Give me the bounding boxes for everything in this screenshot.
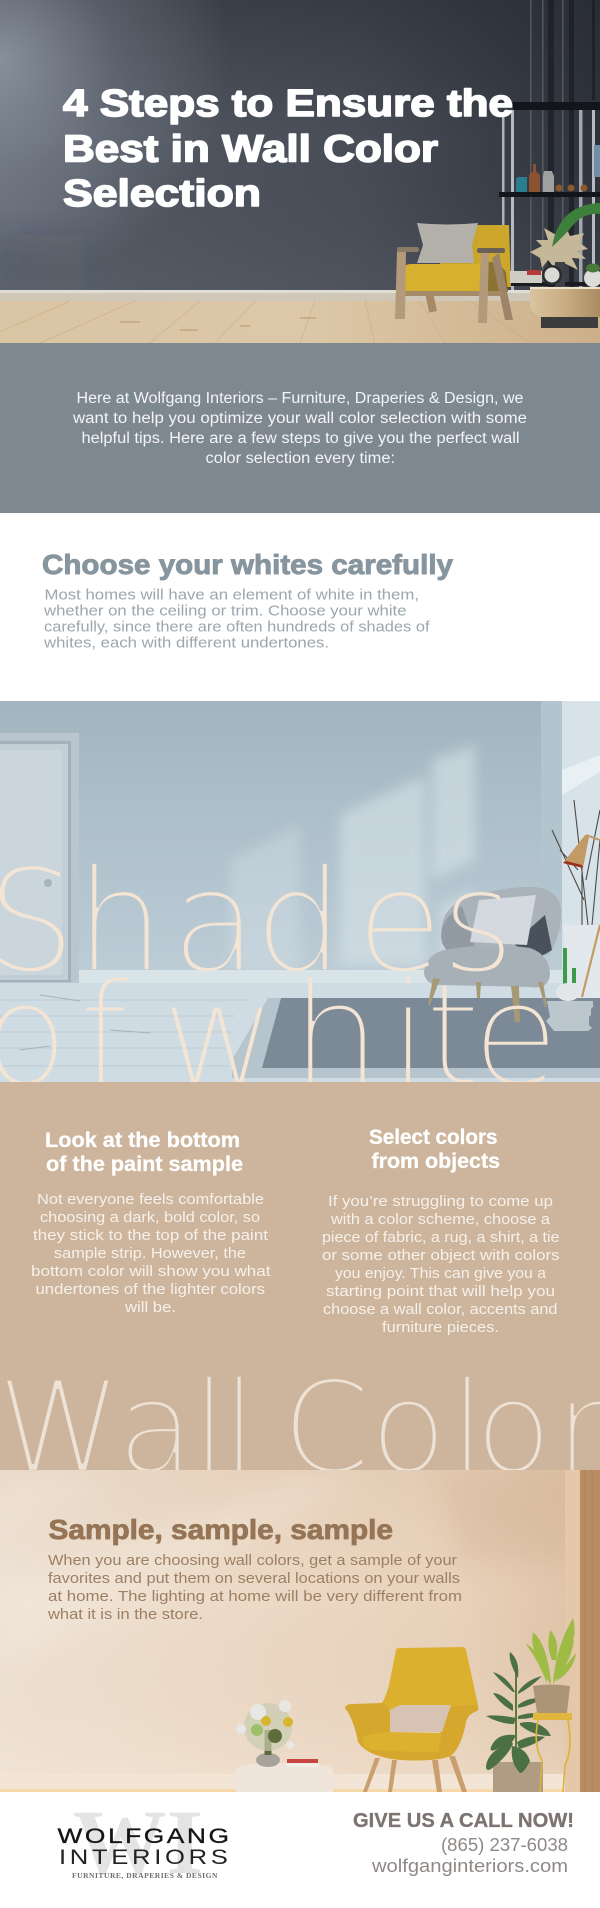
logo: FURNITURE, DRAPERIES & DESIGN — [72, 1871, 218, 1880]
tip: select colors from objects: choose a wall color, accents and — [323, 1301, 558, 1318]
icon: yellow modern chair — [345, 1647, 478, 1792]
panel: intro band — [0, 343, 600, 513]
contact details — [353, 1810, 574, 1876]
body text: favorites and put them on several locations on your walls — [48, 1570, 460, 1587]
body text: whether on the ceiling or trim. Choose your white — [43, 604, 407, 620]
intro text — [72, 390, 527, 467]
tip: select colors from objects: or some other object with colors — [322, 1247, 560, 1264]
panel: choose your whites — [0, 513, 600, 701]
tip: look at the bottom of the paint sample: Look at the bottom — [45, 1129, 240, 1152]
title: Selection — [63, 173, 261, 215]
tip: look at the bottom of the paint sample: they stick to the top of the paint — [33, 1227, 269, 1244]
body text: what it is in the store. — [47, 1606, 203, 1623]
icon: grey armchair — [424, 887, 561, 1022]
window light on wall — [230, 745, 475, 970]
tip: look at the bottom of the paint sample: will be. — [124, 1299, 176, 1316]
tip: select colors from objects: starting point that will help you — [326, 1283, 555, 1300]
title: Best in Wall Color — [63, 128, 438, 170]
tip: select colors from objects: from objects — [372, 1150, 500, 1173]
word art: Wall Color: WallColor — [0, 1354, 600, 1501]
title: 4 Steps to Ensure the — [63, 83, 513, 125]
contact details: GIVE US A CALL NOW! — [353, 1810, 574, 1832]
rug — [232, 998, 600, 1078]
body text — [43, 588, 431, 652]
panel: footer — [0, 1791, 600, 1908]
tip: select colors from objects: Select colors — [369, 1126, 498, 1149]
tip: look at the bottom of the paint sample: choosing a dark, bold color, so — [40, 1209, 260, 1226]
baseboard and floor — [0, 290, 600, 343]
icon: yellow armchair — [395, 223, 513, 323]
icon: side table with plant — [510, 203, 600, 328]
intro text: Here at Wolfgang Interiors – Furniture, Draperies & Design, we — [76, 390, 524, 407]
panel: sample photo — [0, 1470, 600, 1792]
title — [63, 83, 513, 215]
door — [0, 733, 79, 983]
panel: hero photo with title — [0, 0, 600, 343]
icon: plant, lamp and books — [546, 800, 600, 1031]
body text: carefully, since there are often hundreds of shades of — [44, 620, 431, 636]
contact details: (865) 237-6038 — [441, 1835, 568, 1855]
tip: select colors from objects: with a color scheme, choose a — [330, 1211, 551, 1228]
floor — [0, 970, 563, 1072]
wall stripes and shelf — [499, 0, 600, 303]
intro text: want to help you optimize your wall color selection with some — [72, 410, 527, 427]
tip: select colors from objects: If you’re struggling to come up — [328, 1193, 553, 1210]
tip: select colors from objects: furniture pieces. — [382, 1319, 499, 1336]
tip: select colors from objects — [322, 1126, 560, 1336]
tip: look at the bottom of the paint sample — [31, 1129, 271, 1316]
tip: look at the bottom of the paint sample: undertones of the lighter colors — [36, 1281, 265, 1298]
heading: Sample, sample, sample — [48, 1514, 393, 1545]
heading: Choose your whites carefully — [42, 549, 453, 580]
icon: round table with flowers — [236, 1700, 333, 1792]
tip: look at the bottom of the paint sample: sample strip. However, the — [54, 1245, 246, 1262]
tip: look at the bottom of the paint sample: bottom color will show you what — [31, 1263, 271, 1280]
tip: look at the bottom of the paint sample: of the paint sample — [46, 1153, 243, 1176]
intro text: helpful tips. Here are a few steps to give you the perfect wall — [82, 430, 520, 447]
body text: whites, each with different undertones. — [43, 636, 329, 652]
icon: potted plants on stand — [486, 1618, 576, 1792]
logo: WI — [73, 1791, 203, 1893]
body text: Most homes will have an element of white in them, — [44, 588, 419, 604]
body text — [47, 1552, 462, 1623]
tip: look at the bottom of the paint sample: Not everyone feels comfortable — [37, 1191, 264, 1208]
logo: WOLFGANG — [58, 1825, 232, 1848]
panel: shades of white room photo — [0, 701, 600, 1118]
body text: When you are choosing wall colors, get a sample of your — [48, 1552, 457, 1569]
word art: Shades: Shades — [0, 840, 515, 1004]
intro text: color selection every time: — [206, 450, 395, 467]
logo: INTERIORS — [59, 1846, 232, 1869]
panel: two tips on tan — [0, 1082, 600, 1501]
tip: select colors from objects: piece of fabric, a rug, a shirt, a tie — [322, 1229, 560, 1246]
contact details: wolfganginteriors.com — [371, 1856, 568, 1876]
body text: at home. The lighting at home will be very different from — [48, 1588, 462, 1605]
tip: select colors from objects: you enjoy. This can give you a — [335, 1265, 547, 1282]
